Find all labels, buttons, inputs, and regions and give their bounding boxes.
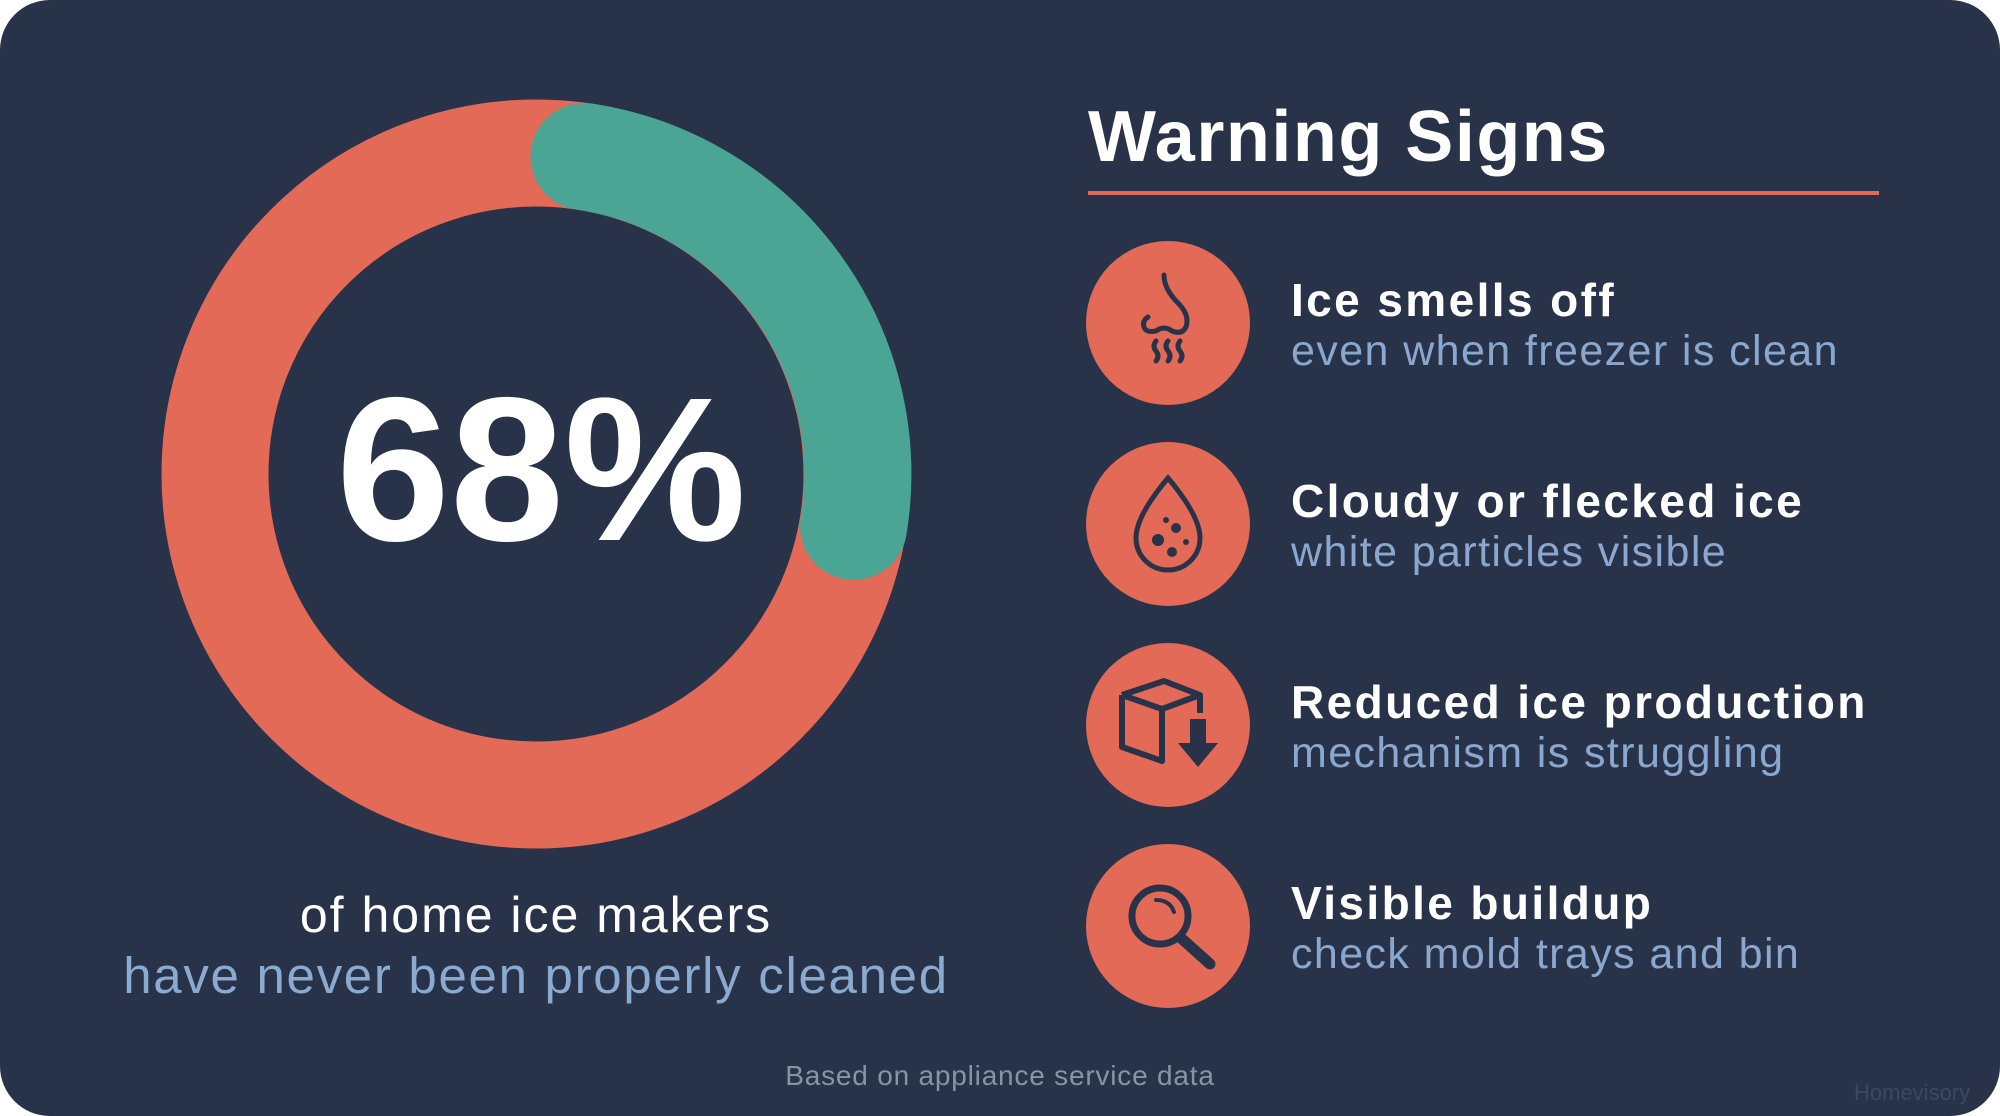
item: buildup: Visible buildup [1291,877,1653,929]
caption: of home ice makers [300,887,772,943]
icon: nose [1086,241,1250,405]
item: production [1086,643,1868,807]
item: smell [1086,241,1839,405]
item: production: Reduced ice production [1291,676,1868,728]
item: cloudy: white particles visible [1291,528,1727,576]
heading: Warning Signs [1088,97,1609,177]
item: cloudy: Cloudy or flecked ice [1291,475,1804,527]
item: production: mechanism is struggling [1291,729,1784,777]
item: cloudy [1086,442,1804,606]
icon: drop [1086,442,1250,606]
caption [123,887,949,1004]
item: buildup: check mold trays and bin [1291,930,1800,978]
icon: magnifier [1086,844,1250,1008]
caption: have never been properly cleaned [123,947,949,1004]
item: smell: even when freezer is clean [1291,327,1839,375]
donut chart [162,100,912,848]
source note: Based on appliance service data [785,1060,1215,1091]
icon: cube with arrow [1086,643,1250,807]
big stat: 68% [336,355,746,584]
item: buildup [1086,844,1800,1008]
brand: Homevisory [1854,1080,1970,1105]
item: smell: Ice smells off [1291,274,1616,326]
